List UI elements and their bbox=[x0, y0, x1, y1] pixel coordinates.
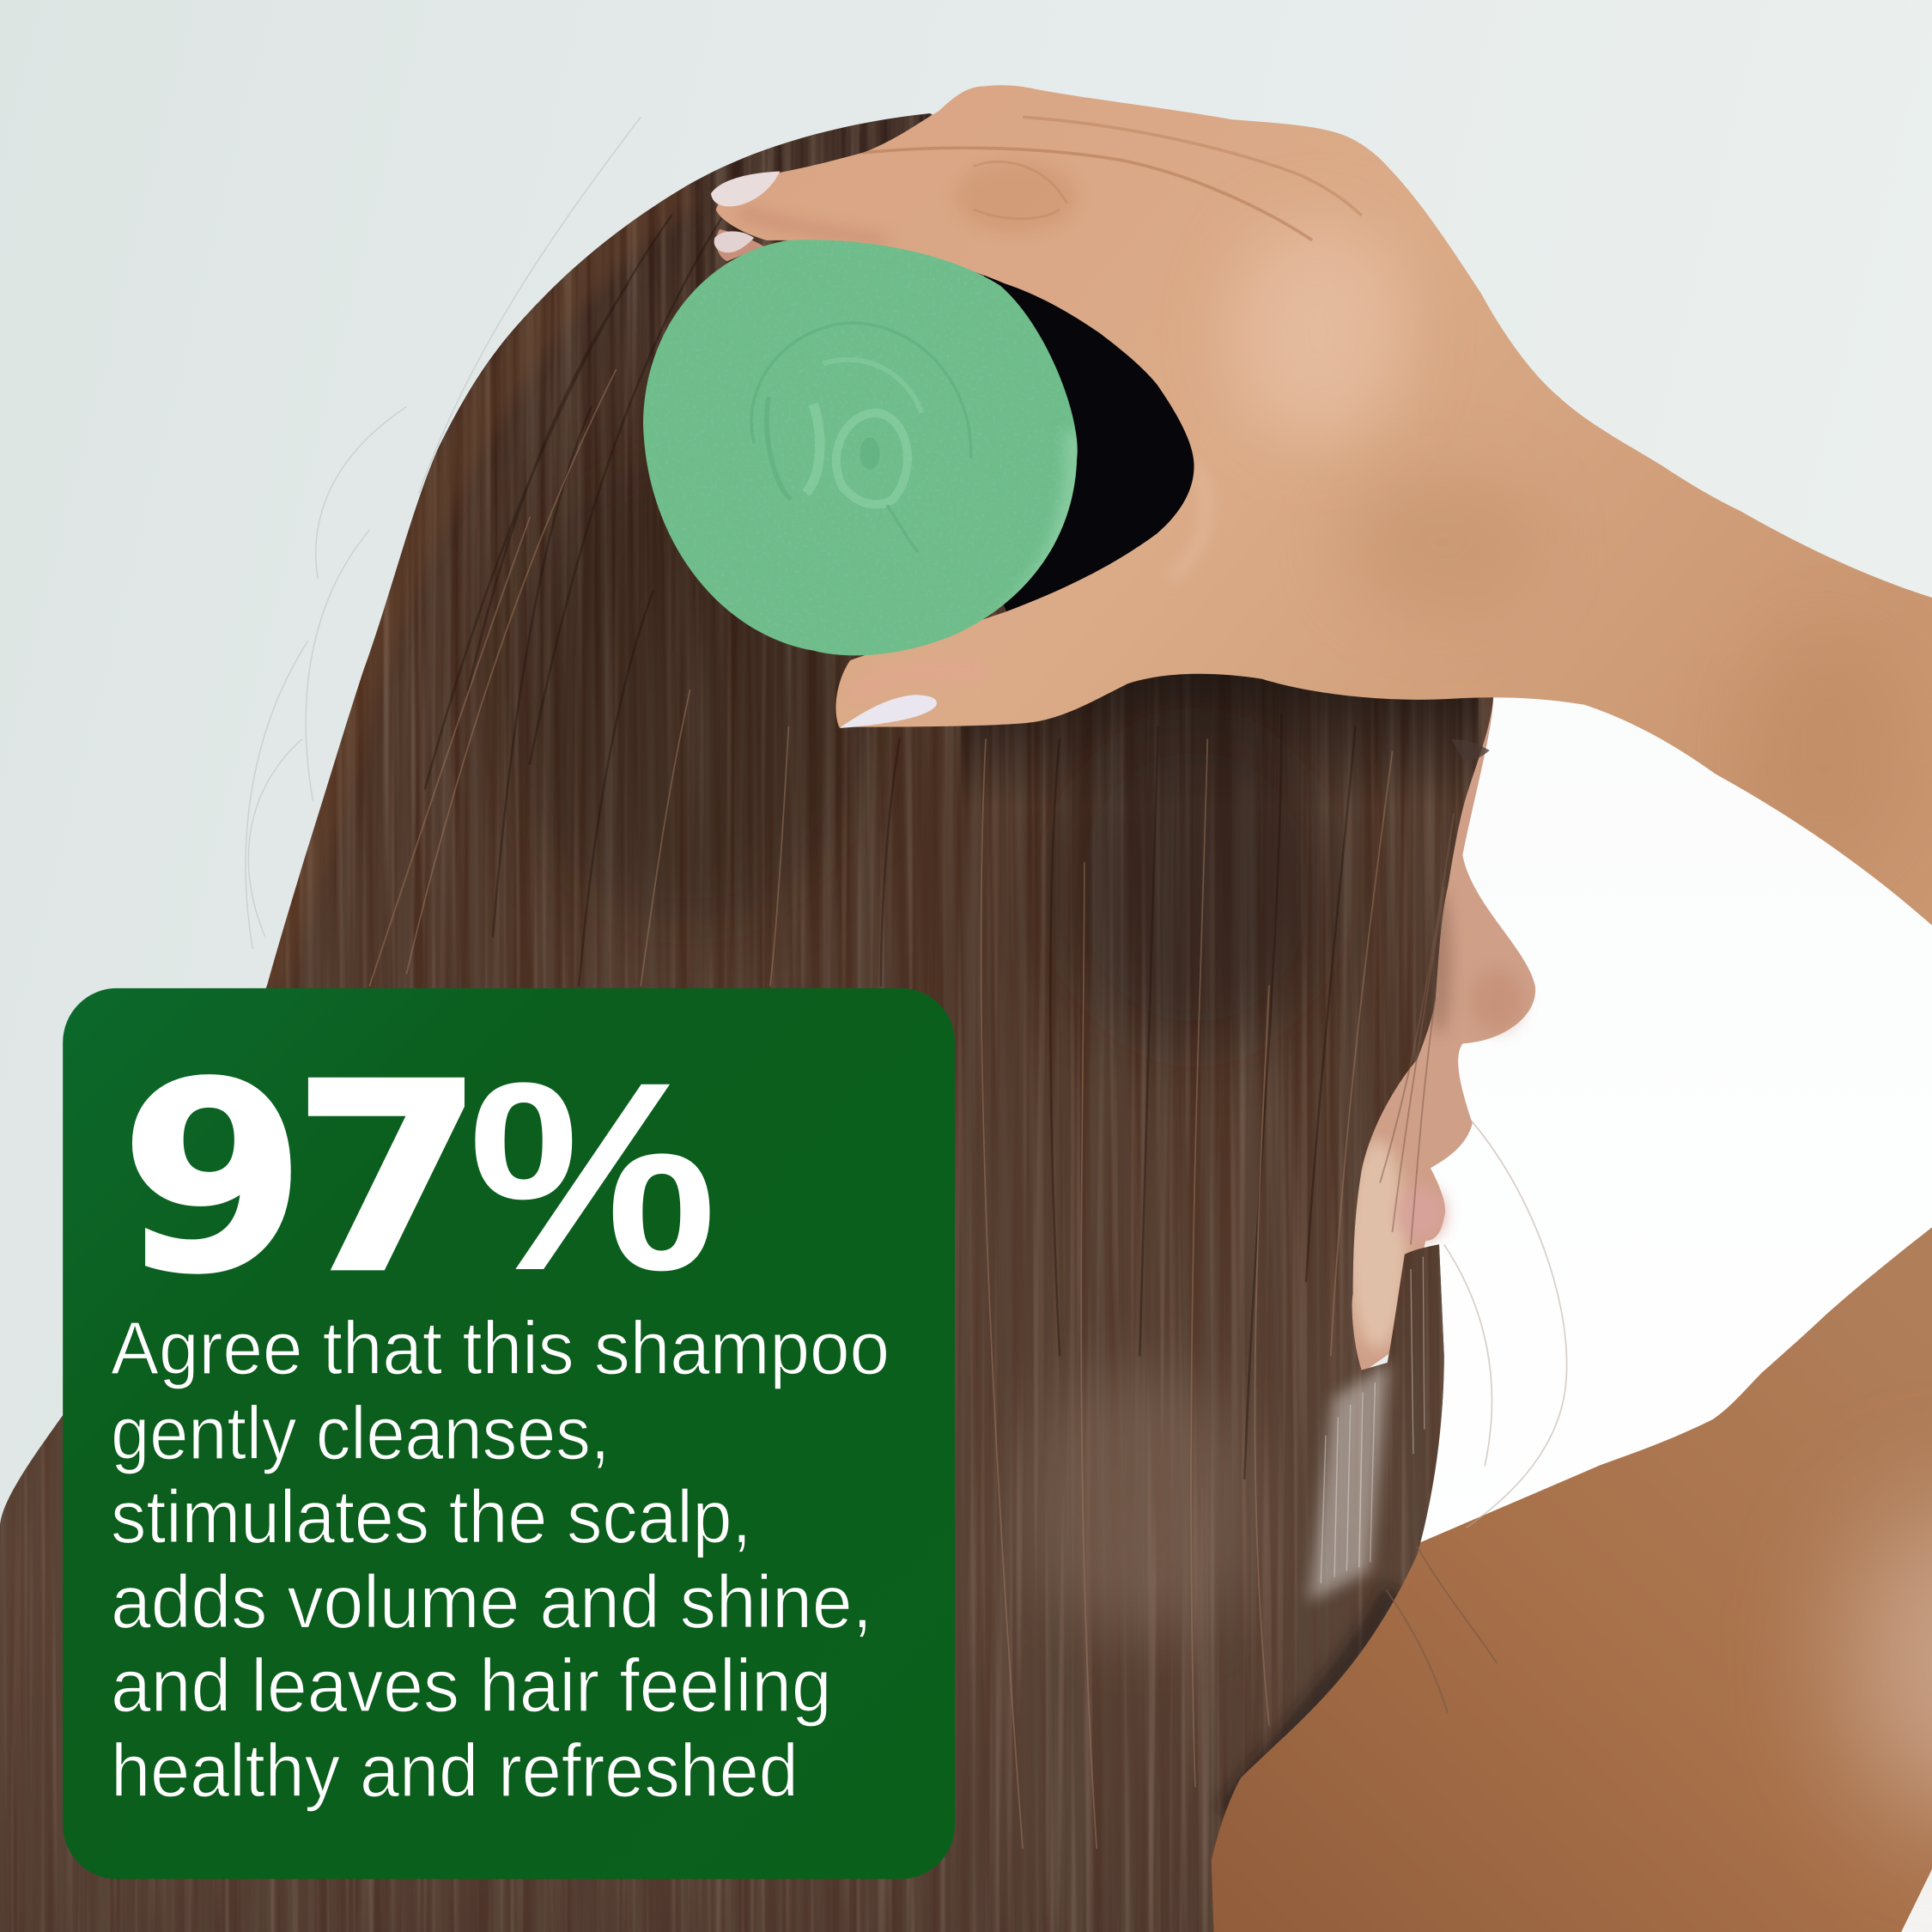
panel: 97% statistic bbox=[63, 988, 955, 1879]
text block: description: Agree that this shampoo bbox=[111, 1306, 890, 1390]
gap between thumb and fingers bbox=[961, 258, 1205, 623]
hand and forearm bbox=[716, 85, 1932, 926]
flyaway hairs bbox=[246, 117, 641, 949]
heading: 97% bbox=[119, 1027, 717, 1331]
face profile bbox=[1306, 696, 1535, 1386]
heading: 97%: 7 bbox=[291, 1027, 485, 1331]
text block: description: stimulates the scalp, bbox=[111, 1475, 751, 1559]
heading: 97%: 9 bbox=[119, 1027, 307, 1331]
embossed logo bbox=[751, 323, 971, 552]
text block: description: and leaves hair feeling bbox=[111, 1643, 832, 1728]
icon: green shampoo bar bbox=[643, 240, 1078, 656]
text block: description bbox=[111, 1306, 890, 1813]
text block: description: adds volume and shine, bbox=[111, 1560, 872, 1644]
hair strands bbox=[369, 210, 1392, 1848]
text block: description: healthy and refreshed bbox=[111, 1728, 799, 1813]
icon: fingernails bbox=[711, 171, 937, 728]
text block: description: gently cleanses, bbox=[111, 1391, 610, 1475]
shoulder bbox=[1109, 1227, 1932, 1932]
heading: 97%: % bbox=[468, 1027, 717, 1327]
light showing through strands bbox=[1309, 1362, 1390, 1601]
